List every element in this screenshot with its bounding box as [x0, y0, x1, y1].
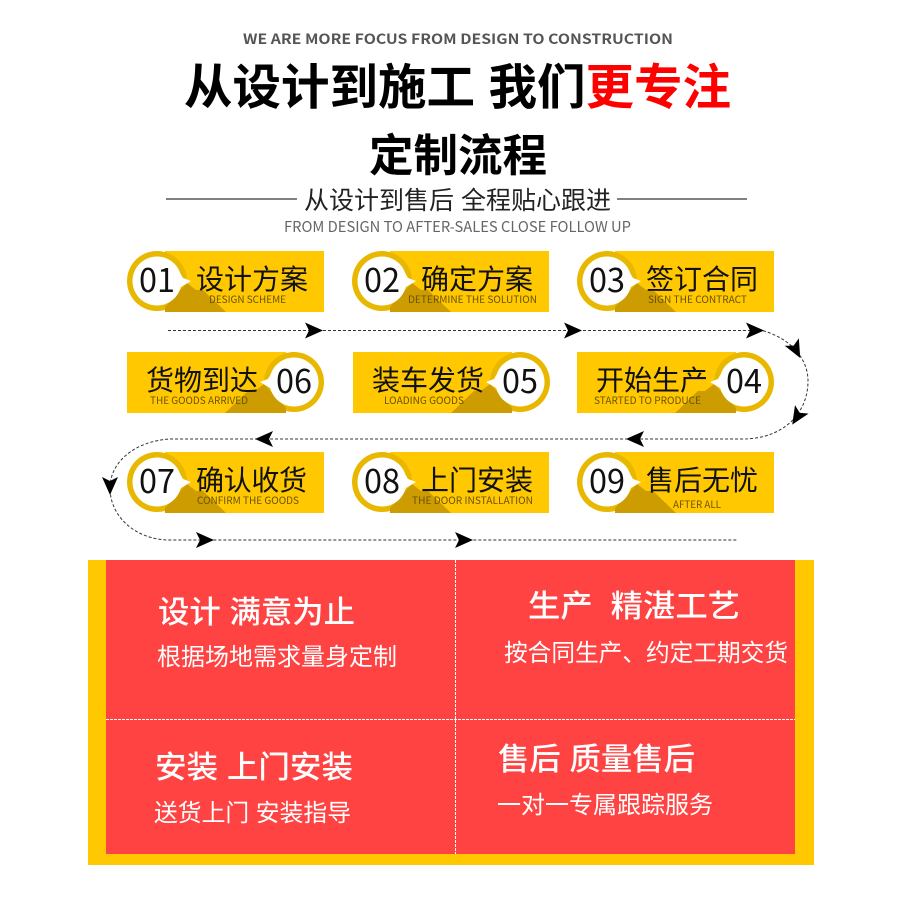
step 08: 08	[364, 455, 400, 503]
step 09	[577, 452, 774, 513]
panel text: installation	[154, 750, 353, 827]
panel text: installation: 安装 上门安装	[155, 750, 353, 785]
step 03	[577, 251, 774, 312]
tagline with rules: 从设计到售后 全程贴心跟进	[304, 187, 611, 215]
step 07: 确认收货	[196, 465, 307, 496]
step 03: 签订合同	[646, 264, 758, 295]
panel text: design: 根据场地需求量身定制	[157, 644, 397, 671]
step 05	[353, 352, 550, 413]
step 07	[127, 452, 324, 513]
step 07: 07	[139, 455, 175, 503]
step 08: THE DOOR INSTALLATION	[412, 492, 533, 507]
panel text: after sales: 一对一专属跟踪服务	[497, 792, 713, 819]
step 02	[352, 251, 549, 312]
step 01: DESIGN SCHEME	[209, 291, 286, 306]
panel: red grid	[106, 560, 795, 854]
english tagline 2: FROM DESIGN TO AFTER-SALES CLOSE FOLLOW UP	[284, 216, 631, 237]
step 04: 开始生产	[596, 365, 708, 396]
main title: 从设计到施工 我们更专注	[184, 61, 731, 115]
panel text: design: 设计 满意为止	[158, 595, 355, 630]
step 01: 设计方案	[196, 264, 308, 295]
step 06: 06	[276, 355, 312, 403]
step 09: 09	[589, 455, 625, 503]
step 06: 货物到达	[146, 365, 258, 396]
step 05: 05	[502, 355, 538, 403]
step 06: THE GOODS ARRIVED	[150, 392, 248, 407]
step 02: DETERMINE THE SOLUTION	[408, 291, 537, 306]
panel text: production	[504, 589, 788, 667]
step 05: LOADING GOODS	[384, 392, 464, 407]
step 09: AFTER ALL	[673, 496, 722, 511]
step 08: 上门安装	[421, 465, 533, 496]
panel text: after sales	[497, 742, 713, 819]
panel text: design	[157, 595, 397, 671]
step 01	[127, 251, 324, 312]
step 03: 03	[589, 254, 625, 302]
panel text: installation: 送货上门 安装指导	[154, 800, 351, 827]
flow arrows	[102, 322, 809, 548]
step 08	[352, 452, 549, 513]
panel text: production: 按合同生产、约定工期交货	[504, 640, 788, 667]
step 02: 确定方案	[421, 264, 533, 295]
panel: yellow backing	[88, 560, 814, 865]
step 04	[577, 352, 774, 413]
subtitle: custom process: 定制流程	[369, 132, 547, 181]
panel text: after sales: 售后 质量售后	[498, 742, 695, 777]
step 01: 01	[139, 254, 175, 302]
step 06	[127, 352, 324, 413]
step 02: 02	[364, 254, 400, 302]
step 07: CONFIRM THE GOODS	[197, 492, 299, 507]
step 09: 售后无忧	[646, 465, 758, 496]
step 04: 04	[726, 355, 762, 403]
panel text: production: 生产 精湛工艺	[528, 589, 740, 624]
step 05: 装车发货	[372, 365, 484, 396]
step 04: STARTED TO PRODUCE	[594, 392, 701, 407]
english tagline: WE ARE MORE FOCUS FROM DESIGN TO CONSTRUCTION	[243, 29, 673, 49]
step 03: SIGN THE CONTRACT	[648, 291, 747, 306]
